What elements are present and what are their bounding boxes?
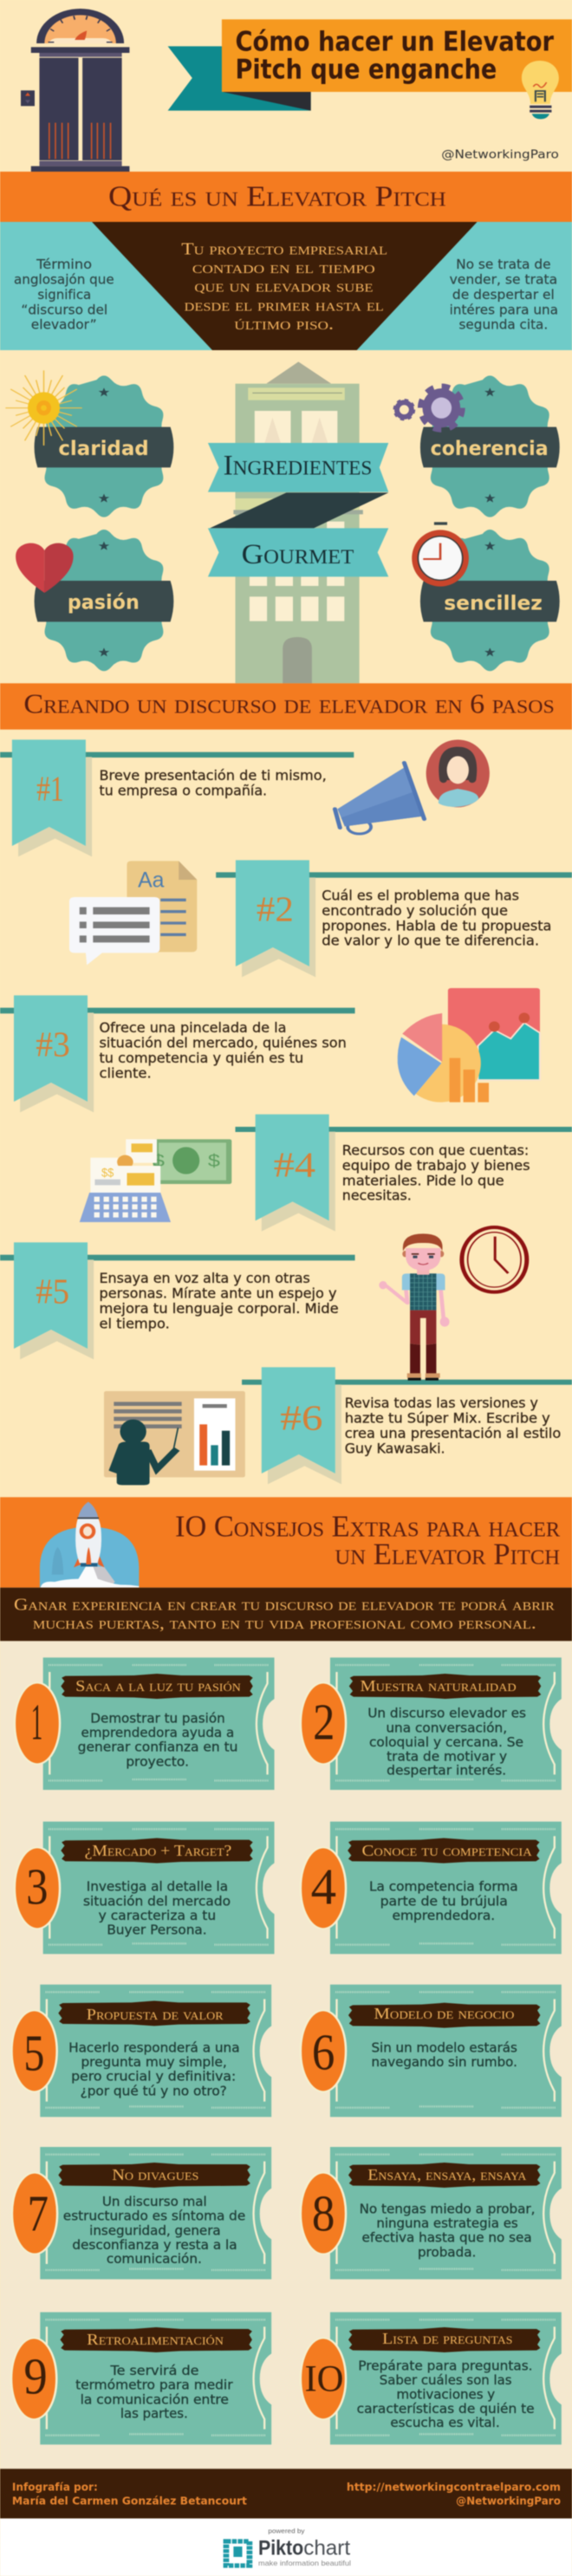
icon: charts [398, 988, 540, 1103]
card 8: efectiva hasta que no sea [362, 2230, 532, 2245]
card 3: situación del mercado [83, 1893, 231, 1909]
step 2: Cuál es el problema que has [322, 888, 519, 904]
badge: pasión: pasión [68, 591, 140, 615]
step 4 [235, 1115, 572, 1232]
card 8: No tengas miedo a probar, [360, 2201, 535, 2216]
card 6: navegando sin rumbo. [371, 2054, 517, 2070]
panel: consejos heading [0, 1497, 572, 1641]
powered by Piktochart: make information beautiful [258, 2560, 351, 2567]
section heading: Qué es un Elevator Pitch [0, 172, 572, 222]
ribbon: gourmet: Gourmet [242, 539, 354, 570]
panel: ingredientes gourmet [0, 361, 572, 730]
card 9: las partes. [120, 2405, 188, 2421]
card 10: Saber cuáles son las [380, 2372, 512, 2388]
illustration: building [233, 361, 363, 683]
card 10: Prepárate para preguntas. [358, 2358, 533, 2373]
card 2: Un discurso elevador es [367, 1706, 526, 1721]
icon: gears [394, 387, 463, 430]
icon: money and register: $ [153, 1151, 165, 1170]
card 8: probada. [418, 2244, 476, 2260]
footer credits: Infografía por: [12, 2482, 98, 2494]
card 2: coloquial y cercana. Se [369, 1734, 523, 1750]
card 2: una conversación, [386, 1720, 507, 1735]
card 10: Lista de preguntas [382, 2331, 512, 2347]
icon: stopwatch [412, 522, 469, 587]
card 1: proyecto. [126, 1753, 189, 1769]
step 5: Ensaya en voz alta y con otras [99, 1271, 310, 1286]
step 1: #1 [36, 769, 64, 809]
card 5: pero crucial y definitiva: [71, 2069, 236, 2084]
powered by Piktochart: Pikto [258, 2536, 303, 2560]
title banner [222, 19, 572, 92]
ribbon: ingredientes [208, 443, 388, 492]
card 8 [301, 2147, 562, 2280]
twitter handle: @NetworkingParo [441, 147, 559, 161]
step 1: tu empresa o compañía. [99, 783, 267, 799]
card 7: No divagues [112, 2167, 198, 2183]
central definition text: contado en el tiempo [192, 257, 375, 277]
central definition text: último piso. [234, 314, 334, 334]
icon: money and register: $ [208, 1151, 220, 1170]
left definition text: significa [37, 288, 91, 302]
card 2 [301, 1657, 562, 1790]
step 5 [0, 1242, 355, 1359]
cards rows 4 and 5 [0, 2147, 572, 2576]
step 5: mejora tu lenguaje corporal. Mide [99, 1301, 339, 1317]
ribbon: gourmet [208, 528, 388, 576]
card 1: generar confianza en tu [78, 1740, 237, 1754]
card 3: Buyer Persona. [107, 1922, 207, 1937]
badge: claridad [35, 375, 173, 517]
panel: pasos 4 a 6 [0, 1115, 572, 1485]
step 2 [216, 860, 572, 977]
powered by Piktochart: chart [303, 2536, 350, 2560]
card 4: La competencia forma [369, 1879, 518, 1894]
intro band: muchas puertas, tanto en tu vida profesional como personal. [33, 1613, 536, 1632]
card 9 [11, 2313, 271, 2444]
left definition text [14, 257, 114, 333]
card 9: la comunicación entre [81, 2391, 229, 2407]
card 6 [301, 1985, 562, 2117]
card 10: motivaciones y [397, 2386, 495, 2402]
step 5: el tiempo. [99, 1316, 170, 1332]
step 1: Breve presentación de ti mismo, [99, 768, 327, 784]
card 4: parte de tu brújula [380, 1893, 508, 1909]
icon: wall clock [462, 1227, 527, 1292]
left definition text: anglosajón que [14, 272, 114, 288]
cards rows 2 and 3 [11, 1822, 562, 2117]
card 4: 4 [311, 1858, 336, 1916]
step 6 bar and ribbon: Guy Kawasaki. [345, 1441, 445, 1457]
central definition text: que un elevador sube [194, 276, 374, 296]
card 7: estructurado es síntoma de [63, 2208, 245, 2223]
ribbon fold [210, 492, 388, 528]
card 3: Investiga al detalle la [87, 1879, 228, 1894]
icon: presenter man [379, 1233, 450, 1381]
card 7: 7 [28, 2185, 49, 2242]
badge: sencillez [420, 530, 560, 671]
card 5: Propuesta de valor [87, 2007, 224, 2023]
card 2: 2 [313, 1694, 335, 1751]
icon: sun [5, 370, 82, 446]
card 2: Muestra naturalidad [360, 1678, 517, 1695]
step 3: #3 [36, 1025, 70, 1064]
card 9: termómetro para medir [75, 2378, 233, 2392]
badge: coherencia [420, 375, 560, 517]
section heading: Qué es un Elevator Pitch: Qué es un Elevator Pitch [108, 179, 446, 212]
step 3: Ofrece una pincelada de la [99, 1020, 286, 1036]
card 2: trata de motivar y [387, 1749, 507, 1764]
card 3: 3 [26, 1858, 49, 1916]
card 6: Sin un modelo estarás [371, 2039, 517, 2055]
card 8: Ensaya, ensaya, ensaya [367, 2167, 527, 2183]
card 3: ¿Mercado + Target? [85, 1843, 231, 1859]
icon: elevator [21, 9, 129, 172]
icon: lightbulb [522, 61, 559, 119]
step 2: #2 [257, 889, 294, 929]
step 6 bar and ribbon [242, 1367, 572, 1484]
right definition text [450, 257, 558, 333]
left definition text: Término [36, 257, 92, 272]
badge: pasión [35, 530, 173, 671]
powered by Piktochart [0, 2519, 572, 2576]
card 8: 8 [312, 2185, 335, 2242]
panel background: consejos [0, 1641, 572, 2469]
card 6: 6 [312, 2024, 335, 2081]
card 5 [11, 1985, 271, 2117]
central definition text [181, 239, 387, 334]
icon: rocket [40, 1502, 139, 1588]
card 1: 1 [31, 1694, 42, 1751]
left definition text: elevador” [31, 317, 97, 333]
card 1: Demostrar tu pasión [90, 1711, 225, 1726]
card 1: Saca a la luz tu pasión [75, 1678, 241, 1695]
step 5: personas. Mírate ante un espejo y [99, 1285, 337, 1302]
card 9: 9 [23, 2348, 48, 2405]
ribbon: ingredientes: Ingredientes [224, 451, 372, 482]
cards row 1 [15, 1657, 562, 1790]
central definition text: desde el primer hasta el [185, 296, 384, 315]
step 5: #5 [36, 1272, 69, 1311]
card 3 [15, 1822, 275, 1954]
panel: definition [0, 222, 572, 350]
card 2: despertar interés. [387, 1763, 506, 1778]
step 3: cliente. [99, 1065, 152, 1082]
title ribbon tail [168, 46, 311, 111]
step 4: equipo de trabajo y bienes [342, 1158, 530, 1174]
footer credits [0, 2469, 572, 2519]
card 9: Retroalimentación [87, 2332, 224, 2348]
card 10 [301, 2313, 562, 2444]
step 3: tu competencia y quién es tu [99, 1051, 303, 1066]
card 10: características de quién te [357, 2401, 535, 2417]
powered by Piktochart: powered by [268, 2527, 305, 2534]
card 7: Un discurso mal [102, 2194, 207, 2209]
card 8: ninguna estrategia es [376, 2215, 518, 2231]
card 4 [301, 1822, 562, 1954]
card 7: desconfianza y resta a la [72, 2237, 237, 2253]
card 1 [15, 1657, 275, 1790]
right definition text: segunda cita. [459, 317, 548, 333]
icon: money and register: $$ [101, 1167, 114, 1180]
icon: presentation board [104, 1391, 245, 1485]
card 9: Te servirá de [110, 2363, 198, 2378]
badge: sencillez: sencillez [444, 591, 543, 615]
central definition text: Tu proyecto empresarial [181, 239, 387, 259]
footer credits: María del Carmen González Betancourt [12, 2495, 247, 2508]
step 4: #4 [274, 1145, 315, 1185]
icon: megaphone [335, 763, 425, 834]
card 5: Hacerlo responderá a una [68, 2039, 240, 2055]
card 5: pregunta muy simple, [81, 2054, 227, 2070]
icon: document and chat bubble [69, 861, 197, 965]
icon: document and chat bubble: Aa [138, 868, 165, 892]
section heading: 10 consejos [175, 1510, 560, 1571]
step 3: situación del mercado, quiénes son [99, 1035, 347, 1051]
card 5: 5 [23, 2025, 44, 2082]
card 10: escucha es vital. [390, 2415, 500, 2430]
card 1: emprendedora ayuda a [81, 1725, 234, 1740]
step 4: necesitas. [342, 1188, 412, 1204]
card 5: ¿por qué tú y no otro? [81, 2083, 227, 2098]
step 3 [0, 995, 355, 1112]
card 10: IO [304, 2358, 344, 2399]
step 6 bar and ribbon: #6 [280, 1398, 323, 1438]
card 4: Conoce tu competencia [362, 1843, 533, 1859]
card 7: inseguridad, genera [89, 2222, 221, 2238]
icon: woman portrait [426, 739, 490, 807]
panel: pasos 1 a 3 [0, 739, 572, 1112]
card 6: Modelo de negocio [374, 2006, 514, 2022]
card 7: comunicación. [107, 2251, 202, 2267]
step 4: Recursos con que cuentas: [342, 1142, 529, 1159]
badge: claridad: claridad [58, 437, 149, 460]
left definition text: “discurso del [21, 302, 107, 318]
icon: money and register [80, 1139, 231, 1222]
section heading: Creando un discurso [0, 683, 572, 730]
card 4: emprendedora. [392, 1908, 495, 1923]
step 4: materiales. Pide lo que [342, 1173, 504, 1189]
card 7 [12, 2147, 271, 2280]
icon: heart [16, 543, 74, 593]
card 3: y caracteriza a tu [99, 1908, 216, 1923]
right definition text: No se trata de [456, 257, 551, 272]
step 2: encontrado y solución que [322, 903, 508, 919]
step 1 [0, 739, 354, 856]
intro band [0, 1588, 572, 1641]
